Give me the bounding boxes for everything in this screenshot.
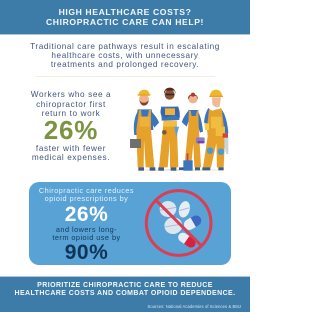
panel text: Chiropractic care reduces — [39, 186, 134, 195]
panel text: opioid prescriptions by — [45, 194, 128, 203]
icon: no pills symbol — [144, 189, 212, 257]
panel text: long-term — [52, 225, 121, 242]
header banner — [0, 0, 250, 35]
worker stat text: Workers who see a — [31, 90, 111, 99]
worker 3 — [179, 93, 205, 171]
worker stat text: return to work — [42, 109, 100, 118]
number: 26%: 26% — [65, 203, 108, 226]
panel text — [39, 186, 134, 203]
panel text: long-term: and lowers long- — [56, 225, 117, 234]
intro text: Traditional care pathways result in escalating — [30, 42, 220, 51]
illustration: four construction workers — [130, 88, 228, 171]
footer banner — [0, 276, 250, 312]
source line: Sources: National Academies of Sciences & BMJ — [148, 304, 241, 308]
divider — [36, 76, 215, 77]
intro text — [30, 42, 220, 69]
header banner: CHIROPRACTIC CARE CAN HELP! — [46, 17, 204, 27]
worker stat text — [30, 90, 111, 162]
header banner: HIGH HEALTHCARE COSTS? — [59, 7, 191, 17]
worker 2 — [158, 88, 180, 171]
worker 1 — [130, 90, 159, 171]
worker stat number: 26% — [44, 114, 98, 144]
panel text: long-term: term opioid use by — [52, 233, 121, 242]
worker stat text: faster with fewer — [36, 144, 106, 152]
footer banner: HEALTHCARE COSTS AND COMBAT OPIOID DEPENDENCE. — [14, 290, 236, 297]
worker stat text: medical expenses. — [32, 153, 110, 162]
number: 90%: 90% — [65, 240, 108, 264]
panel: opioid statistics — [28, 182, 231, 264]
worker 4 — [202, 90, 228, 170]
intro text: treatments and prolonged recovery. — [51, 60, 199, 69]
footer banner: PRIORITIZE CHIROPRACTIC CARE TO REDUCE — [37, 282, 213, 289]
worker stat text: chiropractor first — [36, 100, 106, 108]
intro text: healthcare costs, with unnecessary — [51, 51, 199, 60]
